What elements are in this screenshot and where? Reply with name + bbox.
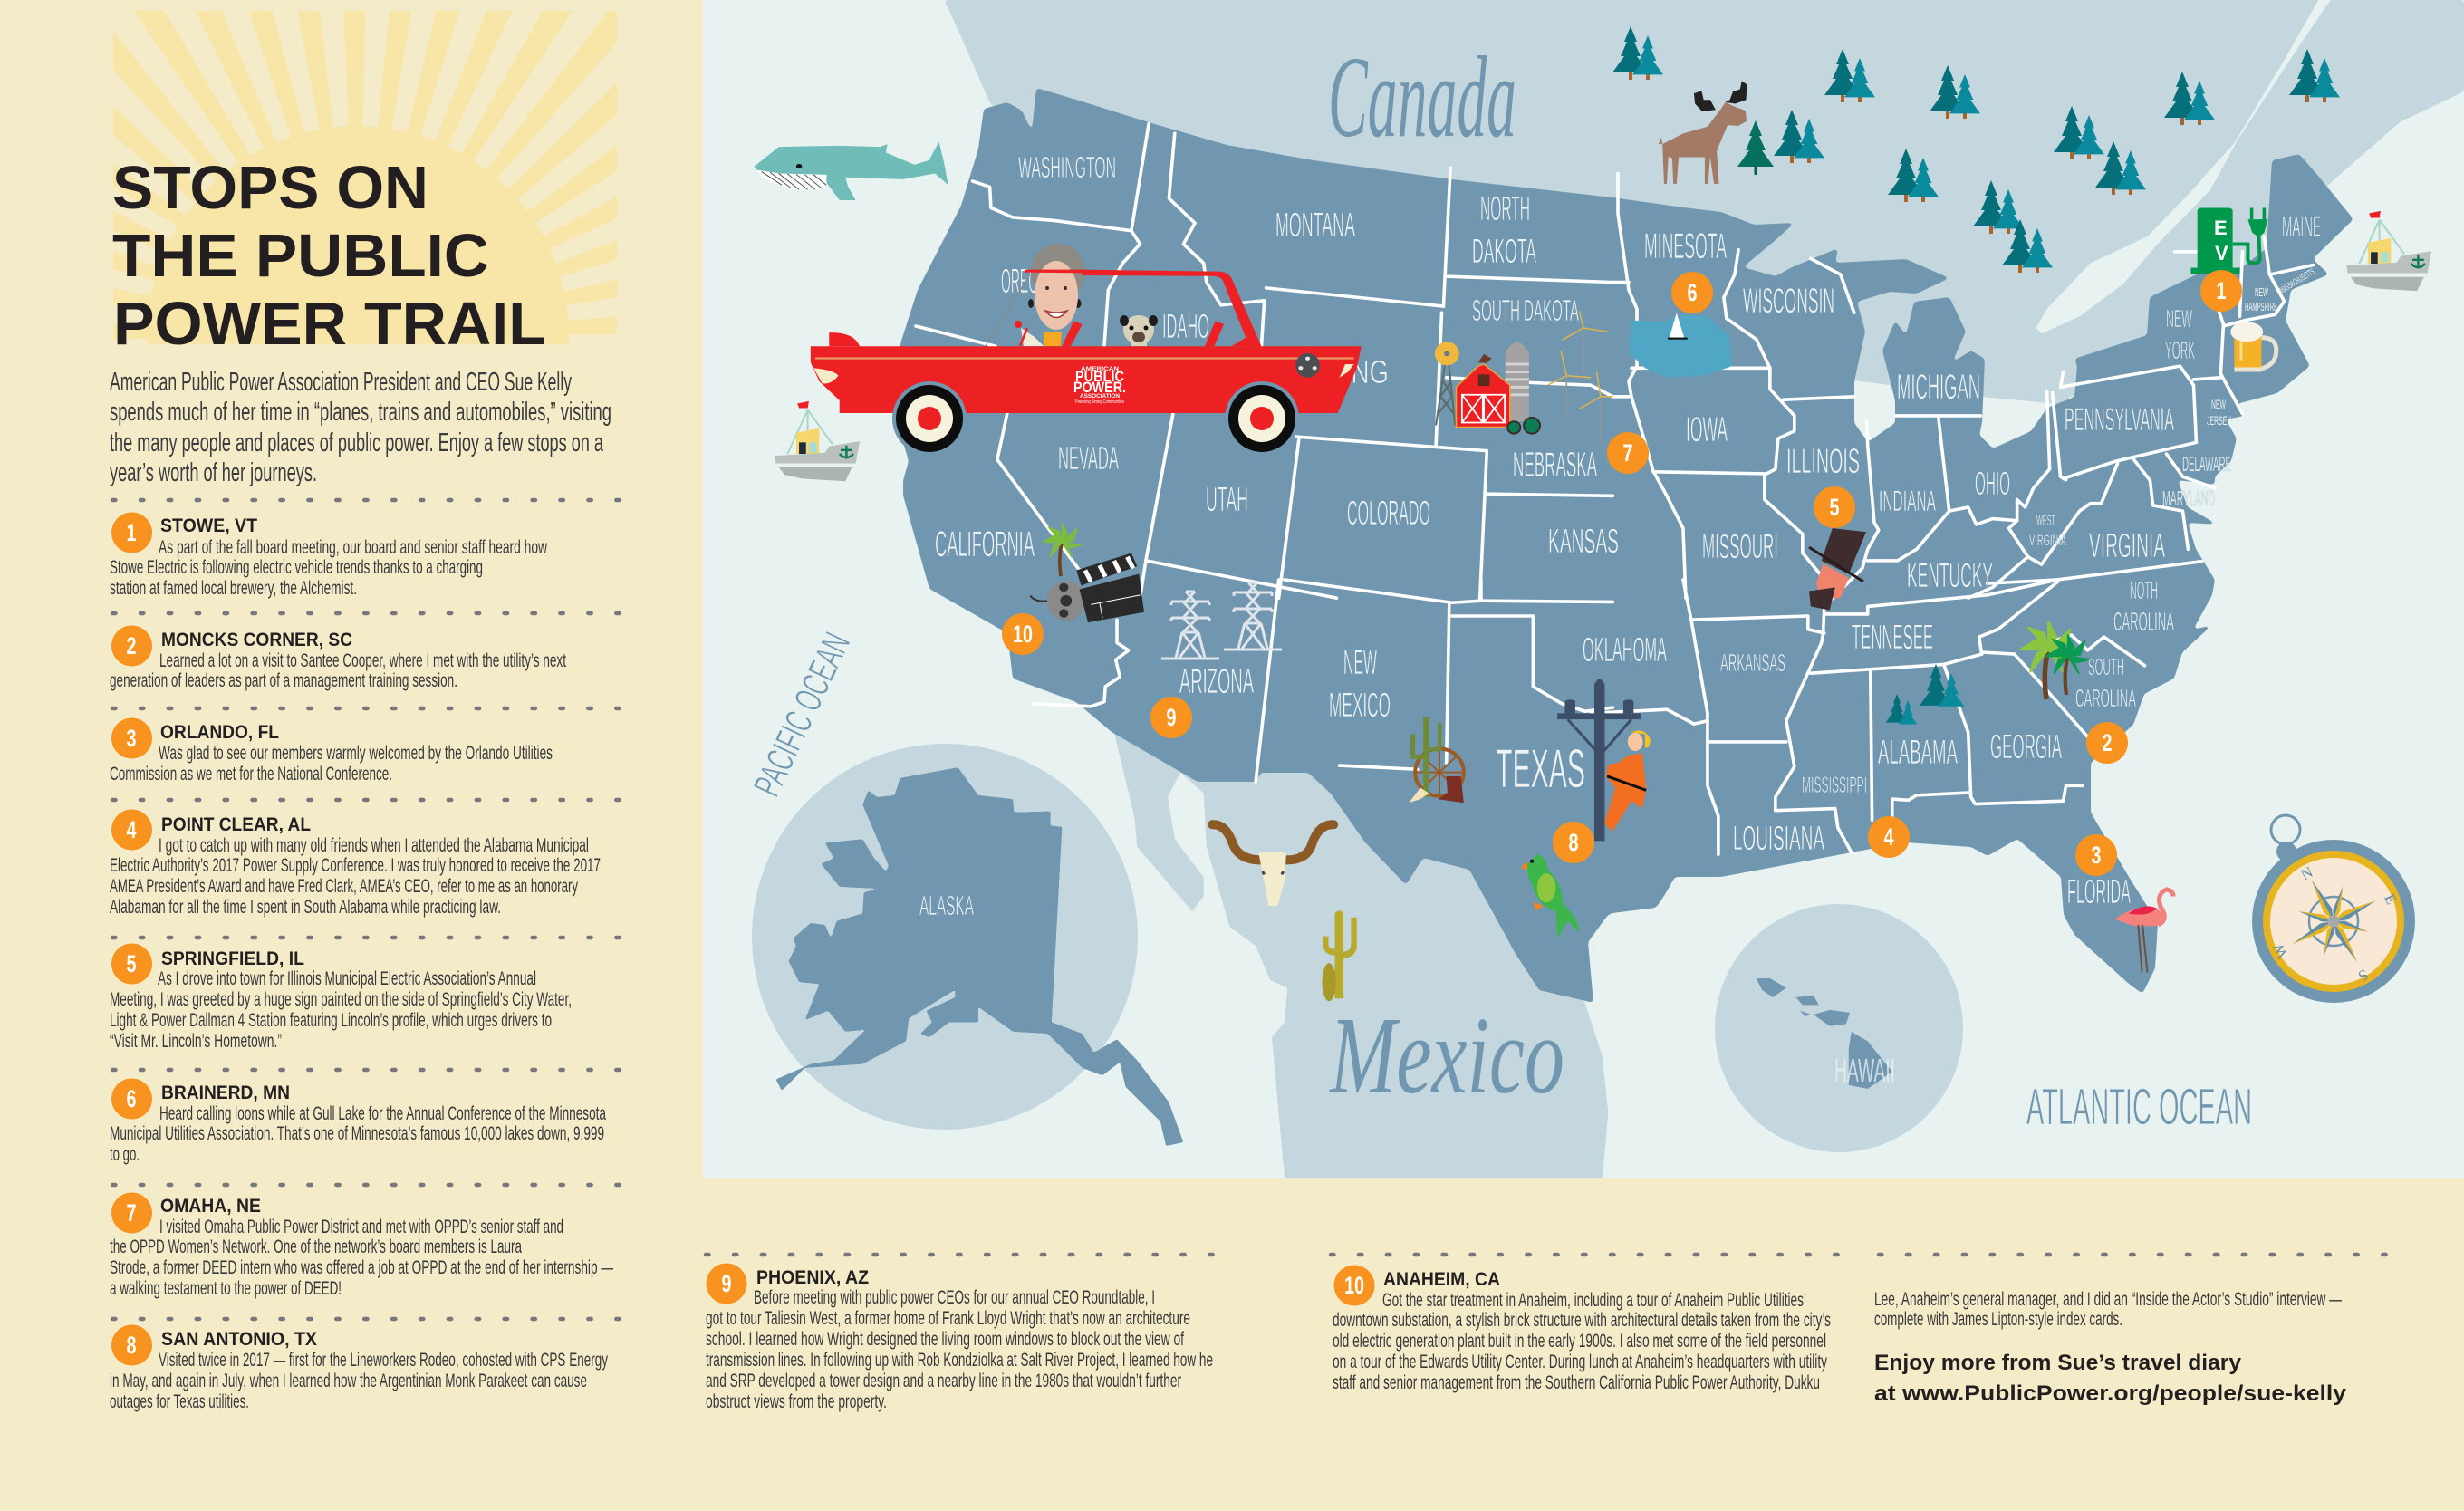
stop 7: Omaha, NE: 7 — [127, 1199, 136, 1227]
stop 2: Moncks Corner, SC: 2 — [127, 632, 136, 659]
state labels: VIRGINIA — [2089, 527, 2165, 565]
stop 9: Phoenix, AZ: obstruct views from the property. — [706, 1391, 887, 1412]
intro text — [110, 368, 611, 487]
stop 6: Brainerd, MN: Heard calling loons while at Gull Lake for the Annual Conference of the Minnesota — [159, 1102, 606, 1124]
stop 7: Omaha, NE: OMAHA, NE — [160, 1196, 261, 1217]
state borders west — [916, 124, 1612, 598]
title: STOPS ON — [112, 154, 428, 222]
Sue Kelly driver — [986, 244, 1085, 346]
icon: lineworker — [1604, 731, 1651, 832]
state labels: OKLAHOMA — [1583, 631, 1667, 669]
car logo: ASSOCIATION — [1080, 393, 1120, 399]
stop 2: Moncks Corner, SC — [110, 613, 620, 691]
state labels: PENNSYLVANIA — [2065, 402, 2174, 438]
state labels: NEVADA — [1058, 439, 1119, 476]
icon: parrot — [1520, 854, 1579, 938]
stop 8: San Antonio, TX: SAN ANTONIO, TX — [161, 1329, 317, 1350]
state labels: TEXAS — [1496, 738, 1585, 799]
state labels: NEW — [1343, 644, 1377, 682]
car trim — [813, 353, 1354, 383]
stop 9: Phoenix, AZ: transmission lines. In following up with Rob Kondziolka at Salt River Project, I learned how he — [706, 1349, 1213, 1371]
stop 6: Brainerd, MN: Municipal Utilities Association. That’s one of Minnesota’s famous 10,000 lakes down, 9,999 — [110, 1122, 604, 1144]
stop 9: Phoenix, AZ: got to tour Taliesin West, a former home of Frank Lloyd Wright that’s now an architecture — [706, 1307, 1190, 1329]
stop 9: Phoenix, AZ — [706, 1255, 1213, 1412]
state labels: JERSEY — [2207, 413, 2231, 428]
map panel: MAINE — [2282, 210, 2321, 243]
map stop markers: 2 — [2102, 729, 2113, 756]
stop 1: Stowe, VT: station at famed local brewery, the Alchemist. — [110, 577, 357, 599]
icon: film reel and clapperboard — [1030, 553, 1144, 622]
map stop markers: 3 — [2091, 842, 2102, 869]
stop 1: Stowe, VT: As part of the fall board meeting, our board and senior staff heard how — [159, 536, 547, 558]
icon: west boat — [775, 401, 860, 481]
icon: whale — [754, 142, 948, 200]
icon: lake with sailboat — [1629, 313, 1732, 378]
stop 6: Brainerd, MN — [110, 1070, 620, 1165]
stop 3: Orlando, FL: ORLANDO, FL — [160, 722, 279, 743]
state labels: NEW — [2166, 304, 2192, 332]
Alaska shape — [776, 767, 1183, 1146]
icon: windmill — [1435, 342, 1459, 425]
icon: east boat — [2346, 211, 2431, 291]
state labels: NEW — [2211, 397, 2226, 411]
state labels: COLORADO — [1347, 495, 1430, 533]
stop 8: San Antonio, TX — [110, 1319, 620, 1412]
contiguous US land — [898, 88, 2353, 1003]
car logo: POWER. — [1073, 379, 1126, 396]
intro text: American Public Power Association President and CEO Sue Kelly — [110, 368, 572, 397]
stop 10: Anaheim, CA: old electric generation plant built in the early 1900s. I also met some of the field personnel — [1333, 1330, 1826, 1352]
pug — [1120, 315, 1158, 346]
stop 3: Orlando, FL: Commission as we met for the National Conference. — [110, 763, 392, 784]
state labels: HAWAII — [1834, 1052, 1895, 1089]
stop 8: San Antonio, TX: Visited twice in 2017 — first for the Lineworkers Rodeo, cohosted with CPS Energy — [159, 1349, 608, 1371]
ocean — [703, 0, 2464, 1178]
Canada region — [944, 0, 2464, 404]
state labels: MISSOURI — [1702, 528, 1778, 566]
state labels: IDAHO — [1162, 308, 1209, 346]
state borders southwest — [1033, 580, 1612, 782]
stop 10: Anaheim, CA: 10 — [1344, 1272, 1364, 1299]
stop 8: San Antonio, TX: 8 — [127, 1332, 136, 1359]
stop 7: Omaha, NE: Strode, a former DEED intern who was offered a job at OPPD at the end of her internship — — [110, 1256, 613, 1278]
stop 4: Point Clear, AL: 4 — [127, 816, 136, 843]
state borders northeast — [1612, 174, 2313, 598]
state labels: KENTUCKY — [1907, 557, 1993, 595]
state labels: CALIFORNIA — [935, 525, 1035, 564]
stop 3: Orlando, FL — [110, 708, 620, 784]
stop 1: Stowe, VT: STOWE, VT — [160, 515, 257, 536]
stop 7: Omaha, NE: I visited Omaha Public Power District and met with OPPD’s senior staff and — [159, 1216, 563, 1237]
stop 1: Stowe, VT: Stowe Electric is following electric vehicle trends thanks to a charging — [110, 556, 483, 578]
state labels: OHIO — [1975, 465, 2010, 502]
state labels: ARKANSAS — [1720, 649, 1785, 677]
state labels: NOTH — [2130, 576, 2158, 604]
stop 5: Springfield, IL: Light & Power Dallman 4 Station featuring Lincoln’s profile, which urges drivers to — [110, 1009, 552, 1031]
icon: compass: S — [2355, 966, 2372, 985]
state labels: OREGON — [1001, 263, 1057, 301]
icon: California palm — [1044, 524, 1082, 576]
state labels: DAKOTA — [1472, 233, 1536, 271]
EV letters — [2214, 217, 2228, 265]
icon: EV charging station — [2190, 207, 2268, 274]
stop 4: Point Clear, AL: AMEA President’s Award and have Fred Clark, AMEA’s CEO, refer to me as an honorary — [110, 875, 578, 897]
state labels: WASHINGTON — [1018, 150, 1116, 184]
state labels: NEW — [2255, 285, 2268, 299]
map stop markers: 5 — [1830, 494, 1839, 521]
state labels: GEORGIA — [1990, 728, 2062, 766]
icon: red car with Sue Kelly and pug — [811, 244, 1362, 456]
stop 6: Brainerd, MN: to go. — [110, 1143, 140, 1165]
stop 6: Brainerd, MN: BRAINERD, MN — [161, 1083, 290, 1103]
stop 6: Brainerd, MN: 6 — [127, 1085, 136, 1112]
state labels: FLORIDA — [2067, 873, 2131, 911]
car logo: Powering Strong Communities — [1075, 399, 1124, 405]
stop 10 continued and call to action: Enjoy more from Sue’s travel diary — [1874, 1351, 2242, 1375]
state labels: MARYLAND — [2162, 486, 2215, 510]
car logo: PUBLIC — [1075, 368, 1124, 385]
EV letters: E — [2214, 217, 2228, 239]
state labels: DELAWARE — [2182, 452, 2231, 476]
state labels: ARIZONA — [1179, 662, 1254, 701]
icon: Alabama pine trees — [1886, 664, 1964, 725]
stop 10: Anaheim, CA: downtown substation, a stylish brick structure with architectural details taken from the city’s — [1333, 1309, 1831, 1331]
stop 7: Omaha, NE: the OPPD Women’s Network. One of the network’s board members is Laura — [110, 1236, 522, 1257]
state labels: IOWA — [1686, 410, 1728, 449]
stop 9: Phoenix, AZ: 9 — [721, 1270, 732, 1297]
state labels: MASSACHUSETTS — [2278, 267, 2317, 296]
stop 9: Phoenix, AZ: Before meeting with public power CEOs for our annual CEO Roundtable, I — [754, 1286, 1155, 1308]
state labels: ILLINOIS — [1786, 442, 1860, 481]
state labels: LOUISIANA — [1733, 820, 1824, 858]
title: THE PUBLIC — [112, 222, 489, 290]
state labels: WEST — [2036, 512, 2055, 529]
stop 4: Point Clear, AL: I got to catch up with many old friends when I attended the Alabama Municipal — [159, 834, 589, 856]
label: Canada: Canada — [1328, 33, 1516, 161]
icon: utility pole — [1557, 679, 1641, 841]
car body — [811, 270, 1362, 413]
stop 10: Anaheim, CA: ANAHEIM, CA — [1383, 1269, 1500, 1290]
Hawaii inset circle — [1715, 904, 1963, 1152]
state labels: MINESOTA — [1644, 226, 1727, 266]
state labels: WYOMING — [1264, 353, 1389, 390]
stop 9: Phoenix, AZ: and SRP developed a tower design and a nearby line in the 1980s that wouldn’t further — [706, 1370, 1181, 1391]
stop 2: Moncks Corner, SC: Learned a lot on a visit to Santee Cooper, where I met with the utility’s next — [159, 650, 566, 671]
icon: barn and silo — [1456, 342, 1540, 434]
stop 8: San Antonio, TX: outages for Texas utilities. — [110, 1391, 249, 1412]
state labels: NORTH — [1480, 190, 1530, 228]
state labels: VIRGINIA — [2029, 532, 2066, 549]
icon: cow skull — [1212, 824, 1333, 906]
stop 2: Moncks Corner, SC: generation of leaders as part of a management training session. — [110, 669, 457, 691]
stop 4: Point Clear, AL — [110, 800, 620, 918]
icon: flamingo — [2115, 890, 2173, 973]
map stop markers: 7 — [1623, 439, 1632, 467]
label: Mexico: Mexico — [1329, 995, 1564, 1117]
intro text: spends much of her time in “planes, trains and automobiles,” visiting — [110, 398, 611, 427]
stop 5: Springfield, IL: 5 — [127, 950, 136, 977]
label: Pacific Ocean: PACIFIC OCEAN — [746, 626, 858, 803]
state labels: MISSISSIPPI — [1802, 773, 1867, 798]
stop 4: Point Clear, AL: POINT CLEAR, AL — [161, 814, 311, 835]
stop 10 continued and call to action — [1874, 1255, 2386, 1406]
map panel — [703, 0, 2464, 1178]
icon: Texas desert cactus, wheel and boots — [1409, 717, 1464, 803]
icon: Georgia palms — [2020, 621, 2089, 699]
car logo — [1073, 366, 1126, 405]
icon: Mexico cactus — [1322, 910, 1357, 1001]
stop 8: San Antonio, TX: in May, and again in July, when I learned how the Argentinian Monk Parakeet can cause — [110, 1370, 587, 1391]
state labels: ALABAMA — [1878, 734, 1958, 772]
icon: compass: E — [2381, 891, 2401, 907]
stop 4: Point Clear, AL: Alabaman for all the time I spent in South Alabama while practicing law. — [110, 896, 501, 918]
state labels: INDIANA — [1879, 485, 1936, 517]
stop 10: Anaheim, CA: on a tour of the Edwards Utility Center. During lunch at Anaheim’s headquarters with utility — [1333, 1351, 1827, 1372]
icon: compass: W — [2269, 939, 2291, 961]
map stop markers: 1 — [2216, 277, 2227, 304]
rear wheel — [892, 381, 967, 456]
car logo: AMERICAN — [1081, 366, 1119, 372]
Alaska inset circle — [752, 744, 1138, 1130]
map stop markers: 9 — [1167, 704, 1176, 731]
stop 5: Springfield, IL: “Visit Mr. Lincoln’s Hometown.” — [110, 1030, 282, 1052]
front wheel — [1225, 381, 1299, 456]
label: Atlantic Ocean: ATLANTIC OCEAN — [2026, 1078, 2252, 1136]
stop 3: Orlando, FL: 3 — [127, 725, 136, 752]
stop 3: Orlando, FL: Was glad to see our members warmly welcomed by the Orlando Utilities — [159, 742, 553, 764]
stop 5: Springfield, IL: As I drove into town for Illinois Municipal Electric Association’s Annual — [158, 967, 536, 989]
stop 10 continued and call to action: at www.PublicPower.org/people/sue-kelly — [1874, 1381, 2347, 1406]
state labels: TENNESEE — [1852, 619, 1933, 657]
stop 9: Phoenix, AZ: PHOENIX, AZ — [756, 1267, 869, 1288]
stop 5: Springfield, IL: Meeting, I was greeted by a huge sign painted on the side of Springfield’s City Water, — [110, 988, 572, 1010]
state labels: ALASKA — [919, 890, 974, 921]
map stop markers: 10 — [1013, 621, 1033, 648]
stop 1: Stowe, VT — [110, 500, 620, 599]
stop 10: Anaheim, CA — [1331, 1255, 1838, 1393]
Hawaii islands — [1757, 978, 1892, 1089]
state labels: MONTANA — [1275, 207, 1355, 245]
state labels: KANSAS — [1548, 523, 1619, 561]
map stop markers: 8 — [1569, 829, 1578, 856]
icon: beer mug — [2230, 322, 2276, 371]
state labels: UTAH — [1206, 481, 1248, 519]
title: POWER TRAIL — [113, 290, 546, 358]
sunburst behind title — [113, 11, 617, 344]
state labels: SOUTH — [2088, 653, 2124, 680]
icon: Lincoln hat and face — [1809, 528, 1866, 611]
state labels: CAROLINA — [2113, 608, 2174, 637]
state labels: WISCONSIN — [1743, 282, 1834, 321]
stop 1: Stowe, VT: 1 — [127, 519, 136, 546]
state labels — [919, 150, 2321, 1089]
stop 9: Phoenix, AZ: school. I learned how Wright designed the living room windows to block out the view of — [706, 1328, 1184, 1350]
stop 10 continued and call to action: complete with James Lipton-style index cards. — [1874, 1308, 2122, 1330]
icon: transmission towers — [1161, 582, 1282, 659]
icon: wind turbines — [1547, 311, 1612, 442]
intro text: year’s worth of her journeys. — [110, 458, 317, 487]
state borders southeast — [1591, 580, 2145, 854]
stop 5: Springfield, IL — [110, 938, 620, 1052]
stop 10: Anaheim, CA: Got the star treatment in Anaheim, including a tour of Anaheim Public Utilities’ — [1382, 1289, 1806, 1311]
state labels: MICHIGAN — [1897, 368, 1980, 407]
stop 7: Omaha, NE — [110, 1185, 620, 1299]
map stop markers — [1002, 270, 2242, 876]
stop 4: Point Clear, AL: Electric Authority’s 2017 Power Supply Conference. I was truly honored to receive the 2017 — [110, 854, 601, 876]
state labels: SOUTH DAKOTA — [1472, 294, 1579, 327]
stop 2: Moncks Corner, SC: MONCKS CORNER, SC — [161, 630, 352, 650]
St Lawrence river — [2036, 0, 2331, 333]
icon: compass: N — [2298, 863, 2315, 883]
state labels: CAROLINA — [2075, 684, 2136, 712]
title — [112, 154, 546, 358]
icon: compass — [2252, 815, 2415, 1003]
stop 5: Springfield, IL: SPRINGFIELD, IL — [161, 948, 304, 969]
map stop markers: 6 — [1687, 279, 1698, 306]
icon: moose — [1659, 81, 1747, 184]
map stop markers: 4 — [1884, 823, 1893, 851]
stop 10: Anaheim, CA: staff and senior management from the Southern California Public Power Authority, Dukku — [1333, 1371, 1820, 1393]
stop 7: Omaha, NE: a walking testament to the power of DEED! — [110, 1277, 342, 1299]
EV letters: V — [2215, 242, 2228, 265]
icon: pine trees in Canada — [1612, 26, 2340, 273]
state labels: MEXICO — [1329, 687, 1391, 725]
intro text: the many people and places of public power. Enjoy a few stops on a — [110, 428, 604, 457]
Mexico region — [1114, 732, 1608, 1178]
state labels: HAMPSHIRE — [2245, 300, 2277, 313]
state labels: NEBRASKA — [1513, 446, 1597, 485]
state labels: YORK — [2165, 336, 2195, 364]
